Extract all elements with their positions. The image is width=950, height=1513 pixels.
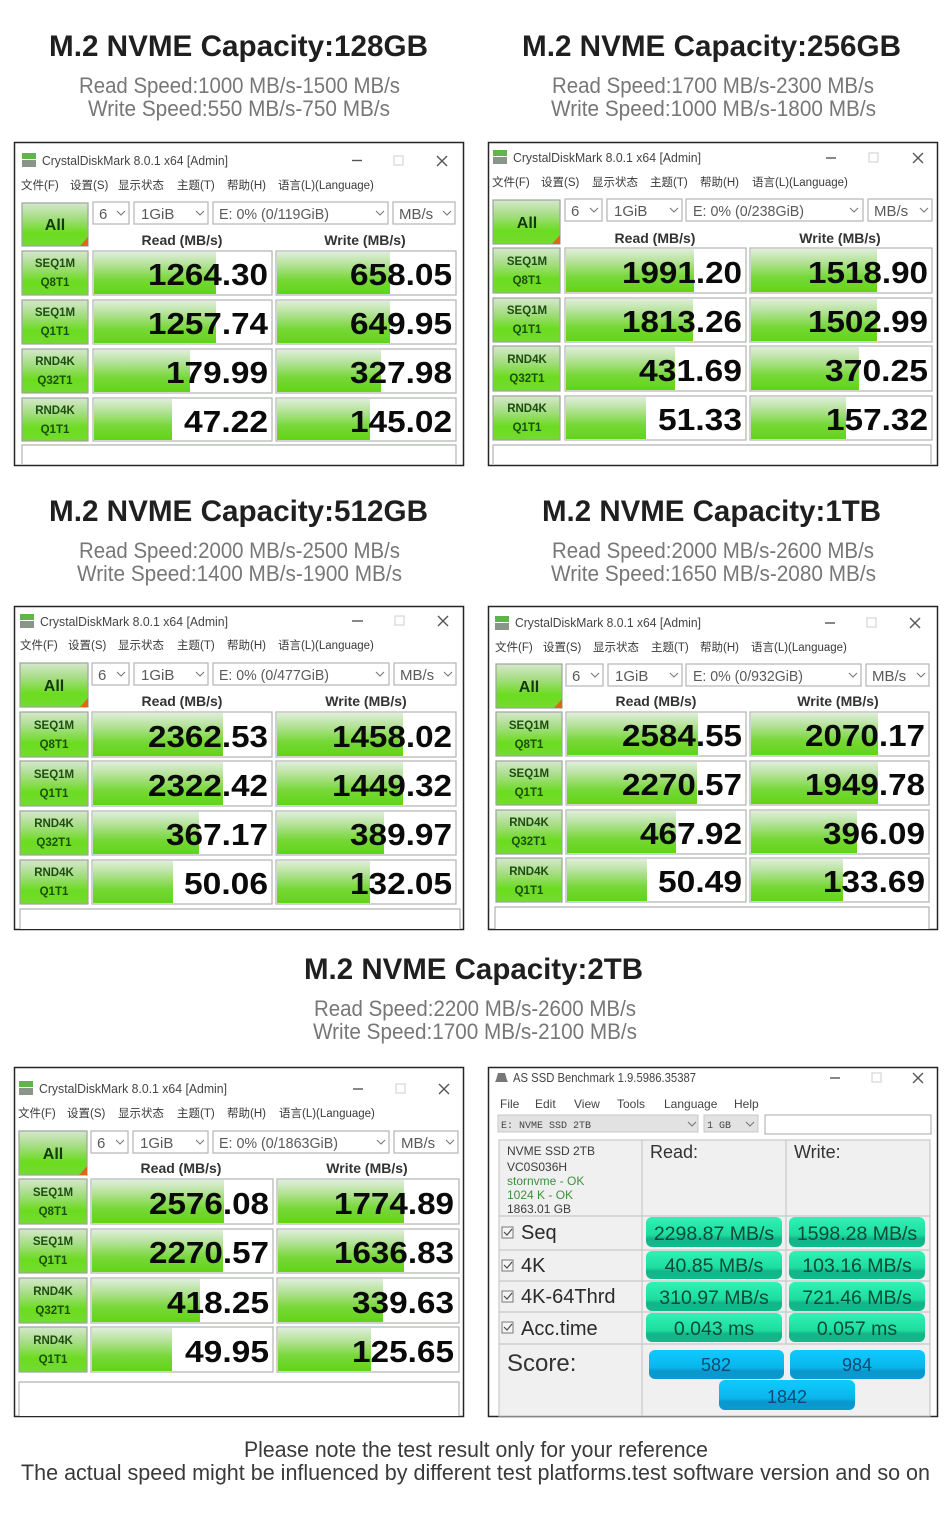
- column headers: Read (MB/s): [616, 693, 696, 709]
- row: RND4K Q32T1: 367.17: [166, 817, 268, 852]
- menu bar: Tools: [617, 1097, 645, 1111]
- heading: 256GB capacity: Write Speed:1000 MB/s-1800 MB/s: [551, 96, 876, 121]
- row: RND4K Q32T1: RND4K: [35, 356, 75, 368]
- row: SEQ1M Q1T1: [19, 1229, 459, 1273]
- row: 4K: 4K: [521, 1255, 546, 1277]
- row: RND4K Q32T1: RND4K: [507, 354, 547, 366]
- column headers: [142, 693, 407, 709]
- panel: CrystalDiskMark 1TB: [488, 606, 938, 930]
- column headers: Write (MB/s): [324, 232, 406, 248]
- comment box: [22, 445, 456, 464]
- row: RND4K Q1T1: 145.02: [350, 404, 452, 439]
- row: RND4K Q1T1: Q1T1: [39, 1354, 68, 1366]
- menu bar: 主题(T): [651, 641, 689, 654]
- menu bar: [21, 178, 374, 192]
- row: Seq: 2298.87 MB/s: [654, 1223, 774, 1245]
- menu bar: 文件(F): [492, 175, 530, 189]
- row: SEQ1M Q1T1: 1502.99: [808, 304, 928, 339]
- settings dropdowns: MB/s: [872, 668, 906, 685]
- menu bar: 设置(S): [543, 641, 581, 654]
- row: SEQ1M Q8T1: 1774.89: [334, 1186, 454, 1221]
- score section: Score:: [507, 1350, 576, 1377]
- menu bar: 设置(S): [70, 179, 108, 192]
- window title bar: CrystalDiskMark 8.0.1 x64 [Admin]: [515, 616, 701, 630]
- row: RND4K Q1T1: 133.69: [823, 864, 925, 899]
- row: RND4K Q1T1: 157.32: [826, 402, 928, 437]
- menu bar: 语言(L)(Language): [278, 639, 374, 652]
- column headers: Write (MB/s): [325, 693, 407, 709]
- menu bar: 设置(S): [541, 176, 579, 189]
- row: 4K-64Thrd: [502, 1282, 925, 1311]
- row: SEQ1M Q1T1: [22, 300, 456, 344]
- row: RND4K Q1T1: RND4K: [34, 867, 74, 879]
- settings dropdowns: E: 0% (0/477GiB): [219, 667, 329, 684]
- row: 4K-64Thrd: 4K-64Thrd: [521, 1286, 616, 1308]
- row: SEQ1M Q1T1: Q1T1: [39, 1255, 68, 1267]
- drive info: VC0S036H: [507, 1160, 567, 1174]
- row: SEQ1M Q1T1: 1949.78: [805, 767, 925, 802]
- heading: 512GB capacity: Read Speed:2000 MB/s-2500 MB/s: [79, 538, 400, 563]
- footer note: [21, 1437, 930, 1485]
- row: RND4K Q1T1: Q1T1: [41, 424, 70, 436]
- panel: CrystalDiskMark 256GB: [488, 142, 938, 466]
- heading: 1TB capacity: Read Speed:2000 MB/s-2600 MB/s: [552, 538, 874, 563]
- row: Seq: 1598.28 MB/s: [797, 1223, 917, 1245]
- row: SEQ1M Q8T1: [20, 712, 456, 757]
- menu bar: 主题(T): [177, 1107, 215, 1120]
- settings dropdowns: 1GiB: [141, 206, 174, 223]
- row: RND4K Q1T1: [19, 1327, 459, 1372]
- row: RND4K Q1T1: 132.05: [350, 866, 452, 901]
- row: 4K: 40.85 MB/s: [665, 1255, 764, 1277]
- settings dropdowns: 1GiB: [141, 667, 174, 684]
- All button: All: [519, 679, 539, 696]
- All button: [19, 1131, 87, 1175]
- row: SEQ1M Q1T1: SEQ1M: [509, 768, 549, 780]
- column headers: Write (MB/s): [797, 693, 879, 709]
- row: RND4K Q32T1: 370.25: [825, 353, 928, 388]
- menu bar: 主题(T): [650, 176, 688, 189]
- row: RND4K Q32T1: RND4K: [509, 817, 549, 829]
- row: RND4K Q1T1: [496, 858, 929, 902]
- window title bar: CrystalDiskMark 8.0.1 x64 [Admin]: [39, 1082, 227, 1096]
- column headers: Read (MB/s): [141, 1160, 221, 1176]
- heading: 2TB capacity: Read Speed:2200 MB/s-2600 MB/s: [314, 996, 636, 1021]
- settings dropdowns: [566, 664, 929, 686]
- menu bar: 帮助(H): [227, 1106, 266, 1120]
- heading: 256GB capacity: Read Speed:1700 MB/s-2300 MB/s: [552, 73, 874, 98]
- column headers: Read (MB/s): [142, 232, 222, 248]
- row: SEQ1M Q8T1: 2584.55: [622, 718, 742, 753]
- heading: 128GB capacity: [49, 30, 428, 121]
- menu bar: View: [574, 1097, 600, 1111]
- settings dropdowns: E: 0% (0/238GiB): [693, 203, 804, 220]
- heading: 512GB capacity: Write Speed:1400 MB/s-1900 MB/s: [77, 561, 402, 586]
- row: RND4K Q32T1: RND4K: [33, 1286, 73, 1298]
- row: RND4K Q1T1: [493, 396, 932, 440]
- drive info: NVME SSD 2TB: [507, 1144, 595, 1158]
- footer note: The actual speed might be influenced by different test platforms.test software version and so on: [21, 1460, 930, 1485]
- heading: 128GB capacity: M.2 NVME Capacity:128GB: [49, 30, 428, 63]
- menu bar: 帮助(H): [227, 178, 266, 192]
- row: RND4K Q32T1: [493, 346, 932, 391]
- row: Seq: [502, 1217, 925, 1247]
- row: RND4K Q32T1: 467.92: [640, 816, 742, 851]
- settings dropdowns: 6: [571, 203, 579, 220]
- menu bar: 显示状态: [118, 1106, 164, 1120]
- settings dropdowns: 1GiB: [140, 1135, 173, 1152]
- row: Seq: Seq: [521, 1222, 557, 1244]
- row: SEQ1M Q8T1: 1991.20: [622, 255, 742, 290]
- heading: 512GB capacity: [49, 495, 428, 586]
- drive selector: 1 GB: [707, 1121, 731, 1132]
- row: SEQ1M Q1T1: SEQ1M: [34, 769, 74, 781]
- row: RND4K Q1T1: RND4K: [509, 866, 549, 878]
- menu bar: File: [500, 1097, 520, 1111]
- row: SEQ1M Q8T1: Q8T1: [40, 739, 69, 751]
- settings dropdowns: MB/s: [399, 206, 433, 223]
- row: RND4K Q32T1: Q32T1: [509, 373, 545, 385]
- row: Acc.time: [502, 1313, 925, 1342]
- column headers: Write (MB/s): [326, 1160, 408, 1176]
- heading: 1TB capacity: [542, 495, 881, 586]
- heading: 256GB capacity: [522, 30, 901, 121]
- row: SEQ1M Q8T1: SEQ1M: [34, 720, 74, 732]
- menu bar: 语言(L)(Language): [279, 1107, 375, 1120]
- row: SEQ1M Q1T1: Q1T1: [41, 326, 70, 338]
- menu bar: 主题(T): [177, 179, 215, 192]
- row: SEQ1M Q1T1: Q1T1: [513, 324, 542, 336]
- row: RND4K Q1T1: Q1T1: [40, 886, 69, 898]
- row: SEQ1M Q1T1: Q1T1: [515, 787, 544, 799]
- heading: 2TB capacity: Write Speed:1700 MB/s-2100 MB/s: [313, 1019, 637, 1044]
- column headers: Read (MB/s): [142, 693, 222, 709]
- comment box: [20, 909, 460, 929]
- row: RND4K Q1T1: Q1T1: [513, 422, 542, 434]
- score section: [507, 1350, 925, 1410]
- column headers: Write (MB/s): [799, 230, 881, 246]
- menu bar: Language: [664, 1097, 718, 1111]
- heading: 128GB capacity: Write Speed:550 MB/s-750 MB/s: [88, 96, 390, 121]
- read and write column headers: Write:: [794, 1142, 841, 1162]
- settings dropdowns: 1GiB: [615, 668, 648, 685]
- row: RND4K Q1T1: 49.95: [185, 1334, 269, 1369]
- All button: [493, 200, 560, 244]
- row: SEQ1M Q1T1: [20, 761, 456, 806]
- All button: All: [44, 678, 64, 695]
- menu bar: 文件(F): [18, 1106, 56, 1120]
- row: RND4K Q32T1: [20, 811, 456, 855]
- heading: 2TB capacity: [304, 953, 643, 1044]
- row: RND4K Q1T1: RND4K: [507, 403, 547, 415]
- row: RND4K Q1T1: Q1T1: [515, 885, 544, 897]
- row: RND4K Q32T1: Q32T1: [37, 375, 73, 387]
- menu bar: 设置(S): [68, 639, 106, 652]
- read and write column headers: [650, 1142, 841, 1162]
- row: RND4K Q1T1: RND4K: [35, 405, 75, 417]
- row: 4K-64Thrd: 310.97 MB/s: [659, 1287, 769, 1309]
- row: 4K: 103.16 MB/s: [802, 1255, 912, 1277]
- row: SEQ1M Q8T1: Q8T1: [39, 1206, 68, 1218]
- menu bar: 显示状态: [592, 175, 638, 189]
- heading: 1TB capacity: M.2 NVME Capacity:1TB: [542, 495, 881, 528]
- menu bar: 帮助(H): [700, 640, 739, 654]
- score section: 1842: [767, 1387, 807, 1407]
- menu bar: 显示状态: [593, 640, 639, 654]
- row: RND4K Q32T1: Q32T1: [35, 1305, 71, 1317]
- settings dropdowns: 6: [572, 668, 580, 685]
- window title bar: [19, 1081, 449, 1096]
- row: SEQ1M Q1T1: [496, 761, 929, 805]
- row: RND4K Q1T1: 125.65: [352, 1334, 454, 1369]
- row: SEQ1M Q8T1: SEQ1M: [33, 1187, 73, 1199]
- row: Acc.time: 0.057 ms: [817, 1318, 897, 1340]
- row: RND4K Q1T1: 47.22: [184, 404, 268, 439]
- heading: 256GB capacity: M.2 NVME Capacity:256GB: [522, 30, 901, 63]
- window title bar: [22, 153, 447, 168]
- row: SEQ1M Q1T1: 1636.83: [334, 1235, 454, 1270]
- column headers: [616, 693, 879, 709]
- column headers: [141, 1160, 408, 1176]
- row: SEQ1M Q1T1: 1813.26: [622, 304, 742, 339]
- settings dropdowns: E: 0% (0/119GiB): [219, 206, 329, 223]
- row: RND4K Q1T1: 50.06: [184, 866, 268, 901]
- row: RND4K Q32T1: 396.09: [823, 816, 925, 851]
- menu bar: 显示状态: [118, 638, 164, 652]
- comment box: [495, 907, 929, 929]
- read and write column headers: Read:: [650, 1142, 698, 1162]
- menu bar: [495, 640, 847, 654]
- row: SEQ1M Q8T1: 1458.02: [332, 719, 452, 754]
- drive info: 1024 K - OK: [507, 1188, 573, 1202]
- row: SEQ1M Q8T1: Q8T1: [41, 277, 70, 289]
- drive info: [507, 1144, 595, 1216]
- row: SEQ1M Q1T1: 2322.42: [148, 768, 268, 803]
- menu bar: [500, 1097, 759, 1111]
- All button: All: [45, 217, 65, 234]
- menu bar: 文件(F): [21, 178, 59, 192]
- settings dropdowns: [91, 1131, 458, 1153]
- row: RND4K Q1T1: 51.33: [658, 402, 742, 437]
- row: RND4K Q32T1: 431.69: [639, 353, 742, 388]
- settings dropdowns: [565, 199, 932, 221]
- drive info: stornvme - OK: [507, 1174, 584, 1188]
- settings dropdowns: MB/s: [400, 667, 434, 684]
- row: RND4K Q1T1: [20, 860, 456, 904]
- window title bar: CrystalDiskMark 8.0.1 x64 [Admin]: [40, 615, 228, 629]
- All button: [496, 664, 562, 708]
- drive selector: [498, 1115, 931, 1134]
- row: RND4K Q32T1: Q32T1: [36, 837, 72, 849]
- menu bar: 语言(L)(Language): [752, 176, 848, 189]
- settings dropdowns: E: 0% (0/1863GiB): [219, 1135, 338, 1152]
- heading: 128GB capacity: Read Speed:1000 MB/s-1500 MB/s: [79, 73, 400, 98]
- row: RND4K Q32T1: Q32T1: [511, 836, 547, 848]
- row: RND4K Q32T1: [19, 1278, 459, 1323]
- settings dropdowns: [92, 663, 456, 685]
- All button: All: [43, 1146, 63, 1163]
- row: Acc.time: 0.043 ms: [674, 1318, 754, 1340]
- row: RND4K Q32T1: [22, 349, 456, 393]
- row: SEQ1M Q1T1: SEQ1M: [507, 305, 547, 317]
- menu bar: 帮助(H): [700, 175, 739, 189]
- window title bar: AS SSD Benchmark 1.9.5986.35387: [513, 1071, 696, 1085]
- settings dropdowns: MB/s: [874, 203, 908, 220]
- row: RND4K Q1T1: 50.49: [658, 864, 742, 899]
- menu bar: 文件(F): [20, 638, 58, 652]
- row: SEQ1M Q8T1: [19, 1179, 459, 1224]
- row: SEQ1M Q8T1: [22, 251, 456, 295]
- menu bar: 文件(F): [495, 640, 533, 654]
- heading: 2TB capacity: M.2 NVME Capacity:2TB: [304, 953, 643, 986]
- panel: CrystalDiskMark 128GB: [14, 142, 464, 466]
- window title bar: [495, 616, 920, 630]
- row: SEQ1M Q1T1: SEQ1M: [33, 1236, 73, 1248]
- row: SEQ1M Q8T1: 658.05: [350, 257, 452, 292]
- score section: 984: [842, 1355, 872, 1375]
- row: SEQ1M Q8T1: 1264.30: [148, 257, 268, 292]
- row: SEQ1M Q8T1: [493, 248, 932, 293]
- All button: [20, 663, 88, 707]
- row: RND4K Q32T1: 179.99: [166, 355, 268, 390]
- row: RND4K Q32T1: 327.98: [350, 355, 452, 390]
- row: SEQ1M Q8T1: 2070.17: [805, 718, 925, 753]
- settings dropdowns: MB/s: [401, 1135, 435, 1152]
- window title bar: CrystalDiskMark 8.0.1 x64 [Admin]: [42, 154, 228, 168]
- menu bar: 帮助(H): [227, 638, 266, 652]
- row: RND4K Q32T1: 418.25: [167, 1285, 269, 1320]
- menu bar: Help: [734, 1097, 759, 1111]
- row: SEQ1M Q1T1: 1449.32: [332, 768, 452, 803]
- row: SEQ1M Q8T1: [496, 712, 929, 756]
- footer note: Please note the test result only for your reference: [244, 1437, 708, 1462]
- row: 4K: [502, 1251, 925, 1279]
- menu bar: 设置(S): [67, 1107, 105, 1120]
- settings dropdowns: 6: [99, 206, 107, 223]
- window title bar: [495, 1071, 923, 1085]
- settings dropdowns: [93, 202, 455, 224]
- row: 4K-64Thrd: 721.46 MB/s: [802, 1287, 912, 1309]
- menu bar: 语言(L)(Language): [278, 179, 374, 192]
- row: RND4K Q1T1: RND4K: [33, 1335, 73, 1347]
- heading: 1TB capacity: Write Speed:1650 MB/s-2080 MB/s: [551, 561, 876, 586]
- All button: All: [517, 215, 537, 232]
- drive selector: E: NVME SSD 2TB: [501, 1121, 591, 1132]
- row: SEQ1M Q8T1: SEQ1M: [35, 258, 75, 270]
- menu bar: [492, 175, 848, 189]
- row: SEQ1M Q8T1: 1518.90: [808, 255, 928, 290]
- settings dropdowns: 1GiB: [614, 203, 647, 220]
- window title bar: CrystalDiskMark 8.0.1 x64 [Admin]: [513, 151, 701, 165]
- window title bar: [20, 614, 448, 629]
- row: RND4K Q32T1: 339.63: [352, 1285, 454, 1320]
- menu bar: 语言(L)(Language): [751, 641, 847, 654]
- menu bar: Edit: [535, 1097, 556, 1111]
- panel: CrystalDiskMark 512GB: [14, 606, 464, 930]
- menu bar: 显示状态: [118, 178, 164, 192]
- All button: [22, 203, 88, 246]
- row: RND4K Q1T1: [22, 398, 456, 441]
- row: SEQ1M Q1T1: 2270.57: [149, 1235, 269, 1270]
- row: SEQ1M Q8T1: 2576.08: [149, 1186, 269, 1221]
- row: SEQ1M Q1T1: 1257.74: [148, 306, 269, 341]
- row: SEQ1M Q8T1: Q8T1: [515, 739, 544, 751]
- score section: 582: [701, 1355, 731, 1375]
- row: SEQ1M Q8T1: 2362.53: [148, 719, 268, 754]
- drive info: 1863.01 GB: [507, 1202, 571, 1216]
- row: SEQ1M Q8T1: SEQ1M: [509, 720, 549, 732]
- row: RND4K Q32T1: RND4K: [34, 818, 74, 830]
- comment box: [493, 445, 931, 464]
- comment box: [19, 1382, 459, 1416]
- menu bar: 主题(T): [177, 639, 215, 652]
- panel: AS SSD Benchmark: [488, 1068, 938, 1416]
- row: SEQ1M Q1T1: 649.95: [350, 306, 452, 341]
- column headers: [615, 230, 881, 246]
- row: SEQ1M Q1T1: Q1T1: [40, 788, 69, 800]
- settings dropdowns: E: 0% (0/932GiB): [693, 668, 803, 685]
- settings dropdowns: 6: [97, 1135, 105, 1152]
- panel: CrystalDiskMark 2TB: [14, 1068, 464, 1416]
- column headers: [142, 232, 406, 248]
- menu bar: [20, 638, 374, 652]
- row: SEQ1M Q1T1: [493, 298, 932, 342]
- window title bar: [493, 150, 923, 165]
- row: SEQ1M Q1T1: SEQ1M: [35, 307, 75, 319]
- heading: 512GB capacity: M.2 NVME Capacity:512GB: [49, 495, 428, 528]
- settings dropdowns: 6: [98, 667, 106, 684]
- row: SEQ1M Q8T1: SEQ1M: [507, 256, 547, 268]
- results table background: [499, 1140, 930, 1416]
- menu bar: [18, 1106, 375, 1120]
- column headers: Read (MB/s): [615, 230, 695, 246]
- row: RND4K Q32T1: 389.97: [350, 817, 452, 852]
- row: SEQ1M Q1T1: 2270.57: [622, 767, 742, 802]
- row: Acc.time: Acc.time: [521, 1318, 598, 1340]
- row: RND4K Q32T1: [496, 810, 929, 854]
- row: SEQ1M Q8T1: Q8T1: [513, 275, 542, 287]
